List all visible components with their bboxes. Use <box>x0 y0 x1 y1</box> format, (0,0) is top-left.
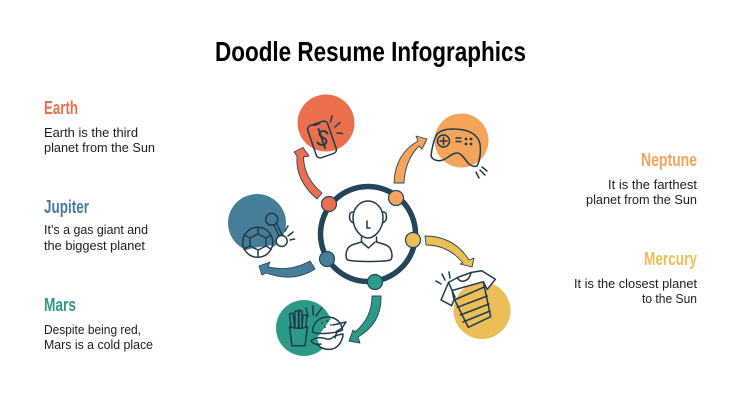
text: Jupiter description: It’s a gas giant and <box>44 223 148 237</box>
node: red <box>322 196 336 212</box>
panel: Neptune <box>586 150 698 207</box>
text: Neptune description <box>586 178 698 207</box>
node: blue <box>320 252 334 266</box>
heading: Mars: Mars <box>44 295 76 315</box>
heading: Earth: Earth <box>44 98 78 118</box>
icon: sports ball and racket <box>228 194 294 257</box>
text: Earth description: planet from the Sun <box>44 141 155 155</box>
icon: phone with dollar <box>298 94 354 159</box>
text: Mars description: Mars is a cold place <box>44 338 153 352</box>
central ring with person <box>320 186 420 290</box>
text: Mercury description: to the Sun <box>642 292 697 306</box>
text: Jupiter description <box>44 223 148 253</box>
text: Mercury description: It is the closest planet <box>574 277 698 291</box>
panel: Mercury <box>574 249 698 306</box>
arrow: to Mars <box>349 296 381 343</box>
arrow: to Neptune <box>394 136 427 183</box>
heading: Neptune: Neptune <box>641 150 697 170</box>
text: Neptune description: planet from the Sun <box>586 193 697 207</box>
text: Mercury description <box>574 277 698 306</box>
text: Earth description: Earth is the third <box>44 126 138 140</box>
text: Mars description: Despite being red, <box>44 323 141 337</box>
panel: Earth <box>44 98 155 155</box>
title: Doodle Resume Infographics <box>215 36 526 67</box>
text: Neptune description: It is the farthest <box>608 178 698 192</box>
panel: Mars <box>44 295 153 352</box>
node: teal <box>368 274 382 290</box>
node: orange <box>388 190 404 206</box>
text: Jupiter description: the biggest planet <box>44 239 146 253</box>
panel: Jupiter <box>44 197 148 253</box>
icon: game controller <box>431 114 488 178</box>
heading: Jupiter: Jupiter <box>44 197 89 217</box>
icon: striped t-shirt <box>436 271 510 339</box>
arrow: to Earth <box>294 148 322 199</box>
icon: person <box>346 201 392 262</box>
icon: fries and burger <box>276 300 346 356</box>
heading: Mercury: Mercury <box>644 249 697 269</box>
node: yellow <box>406 232 420 248</box>
arrow: to Jupiter <box>259 261 315 277</box>
arrow: to Mercury <box>425 236 474 267</box>
text: Mars description <box>44 323 153 352</box>
text: Earth description <box>44 126 155 155</box>
